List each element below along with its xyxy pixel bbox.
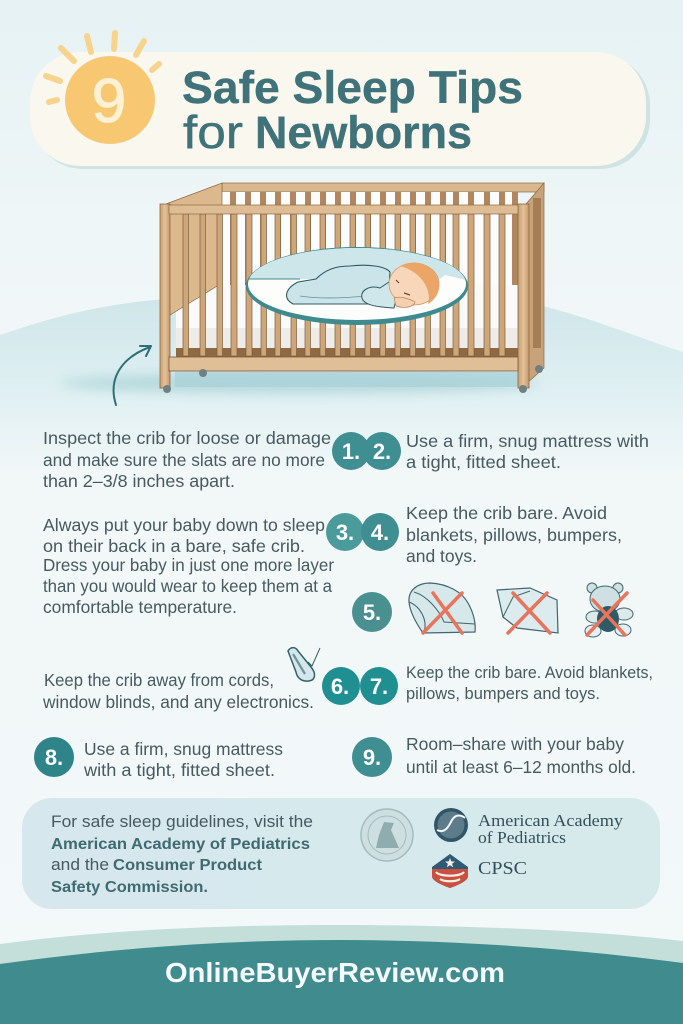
tips 1 and 2 badge: 2. [373,439,391,464]
resources text: American Academy of Pediatrics [51,836,310,853]
close-up of sleeping baby [246,247,468,325]
tip 4 text: and toys. [406,546,477,566]
resources text: For safe sleep guidelines, visit the [51,813,313,831]
logo: CPSC: CPSC [478,858,527,878]
tip 5 text: comfortable temperature. [43,597,237,617]
tip 8 text: Use a firm, snug mattress [84,739,283,759]
crib back and mattress [166,183,544,384]
tip 4 text [406,503,622,566]
title text: Safe Sleep Tips [182,62,523,113]
tip 4 text: Keep the crib bare. Avoid [406,503,607,523]
tip 1 text: Inspect the crib for loose or damage [43,428,331,448]
tip 3 text: on their back in a bare, safe crib. [43,536,305,556]
tip 5 badge [352,592,392,632]
crib frame [160,204,543,393]
tip 1 text: and make sure the slats are no more [43,450,325,470]
footer band [0,925,683,1024]
resources text: Safety Commission. [51,879,208,896]
tip 8 badge [34,737,74,777]
tip 8 text [83,739,283,780]
tip 1 text [43,428,331,491]
arrow pointing to crib [114,346,151,405]
icon: crossed-out blanket [409,583,475,633]
website text: OnlineBuyerReview.com [165,957,505,988]
tips 6 and 7 badge: 7. [370,674,388,699]
tip 9 text: until at least 6–12 months old. [406,757,636,777]
tips 3 and 4 badge: 3. [336,520,354,545]
tip 6 text [42,670,314,712]
tips 6 and 7 badge: 6. [331,674,349,699]
icon: crossed-out teddy bear [585,583,633,637]
resources text [51,813,313,896]
tip 5 text: Dress your baby in just one more layer [43,555,334,575]
logo: CPSC [432,854,527,888]
tips 1 and 2 badge: 1. [342,439,360,464]
resources text: and the [51,856,109,874]
tips 3 and 4 badge [326,513,399,551]
title text: Newborns [255,107,472,158]
tip 1 text: than 2–3/8 inches apart. [43,471,235,491]
background hill [0,298,683,470]
tip 7 text: Keep the crib bare. Avoid blankets, [406,664,653,682]
icon: sun with number 9 [46,33,159,144]
logo: seal [361,809,413,861]
tip 3 text: Always put your baby down to sleep [43,515,325,535]
tips 6 and 7 badge [322,667,398,705]
tips 1 and 2 badge [332,432,401,470]
crib illustration [60,183,544,393]
title text: for [183,106,243,158]
title banner [30,33,650,169]
tip 2 text: a tight, fitted sheet. [406,452,561,472]
title text [182,62,523,158]
logo: American Academy of Pediatrics [434,808,624,847]
resources panel [22,798,660,909]
tip 5 text [43,555,334,617]
tip 9 badge [352,737,392,777]
tip 2 text [406,431,649,472]
icon: sun with number 9: 9 [92,67,126,136]
tip 5 badge: 5. [363,600,381,625]
tip 8 badge: 8. [45,745,63,770]
tip 6 text: Keep the crib away from cords, [44,670,274,690]
tip 7 text [406,664,653,703]
tip 4 text: blankets, pillows, bumpers, [406,525,622,545]
tip 8 text: with a tight, fitted sheet. [83,760,275,780]
tip 6 text: window blinds, and any electronics. [42,692,314,712]
crib front slats [183,214,505,356]
tip 9 badge: 9. [363,745,381,770]
tip 2 text: Use a firm, snug mattress with [406,431,649,451]
tip 5 text: than you would wear to keep them at a [43,576,332,596]
logo: American Academy of Pediatrics: American Academy [478,811,624,830]
tip 9 text [406,734,636,777]
tips 3 and 4 badge: 4. [371,520,389,545]
tip 3 text [43,515,325,556]
tip 9 text: Room–share with your baby [406,734,624,754]
resources text: Consumer Product [113,857,263,874]
tip 7 text: pillows, bumpers and toys. [406,685,600,703]
icon: crossed-out pillow [497,588,558,633]
logo: American Academy of Pediatrics: of Pediatrics [478,828,566,847]
icon: thermometer with check [288,648,320,681]
